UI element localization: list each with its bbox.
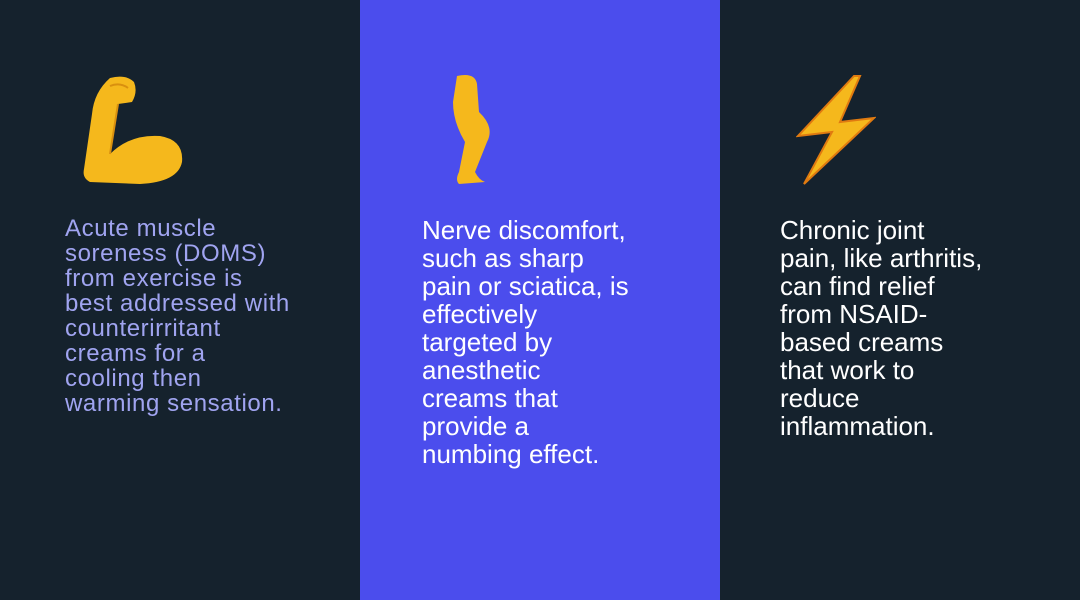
text: muscle soreness: Acute muscle xyxy=(65,215,216,242)
text: nerve discomfort: anesthetic xyxy=(422,355,541,385)
text: nerve discomfort xyxy=(422,215,629,469)
text: muscle soreness: from exercise is xyxy=(65,265,243,292)
text: muscle soreness: cooling then xyxy=(65,365,202,392)
icon: flexed biceps xyxy=(84,76,182,184)
text: nerve discomfort: numbing effect. xyxy=(422,439,599,469)
text: muscle soreness: best addressed with xyxy=(65,290,290,317)
text: chronic joint pain: based creams xyxy=(780,327,943,357)
text: chronic joint pain: inflammation. xyxy=(780,411,935,441)
icon: leg xyxy=(453,75,490,184)
text: muscle soreness: creams for a xyxy=(65,340,206,367)
text: muscle soreness: warming sensation. xyxy=(65,390,283,417)
text: chronic joint pain xyxy=(780,215,982,441)
text: muscle soreness: soreness (DOMS) xyxy=(65,240,266,267)
text: nerve discomfort: targeted by xyxy=(422,327,552,357)
text: nerve discomfort: such as sharp xyxy=(422,243,584,273)
panel: muscle soreness xyxy=(0,0,360,600)
text: nerve discomfort: Nerve discomfort, xyxy=(422,215,626,245)
panel: nerve discomfort xyxy=(360,0,720,600)
text: chronic joint pain: that work to xyxy=(780,355,914,385)
text: nerve discomfort: pain or sciatica, is xyxy=(422,271,629,301)
icon: lightning bolt xyxy=(796,75,876,185)
text: chronic joint pain: pain, like arthritis, xyxy=(780,243,982,273)
text: nerve discomfort: creams that xyxy=(422,383,558,413)
text: chronic joint pain: can find relief xyxy=(780,271,935,301)
text: muscle soreness xyxy=(65,215,290,417)
text: chronic joint pain: from NSAID- xyxy=(780,299,927,329)
panel: chronic joint pain xyxy=(720,0,1080,600)
text: chronic joint pain: reduce xyxy=(780,383,860,413)
text: nerve discomfort: effectively xyxy=(422,299,537,329)
text: chronic joint pain: Chronic joint xyxy=(780,215,925,245)
text: nerve discomfort: provide a xyxy=(422,411,529,441)
text: muscle soreness: counterirritant xyxy=(65,315,221,342)
